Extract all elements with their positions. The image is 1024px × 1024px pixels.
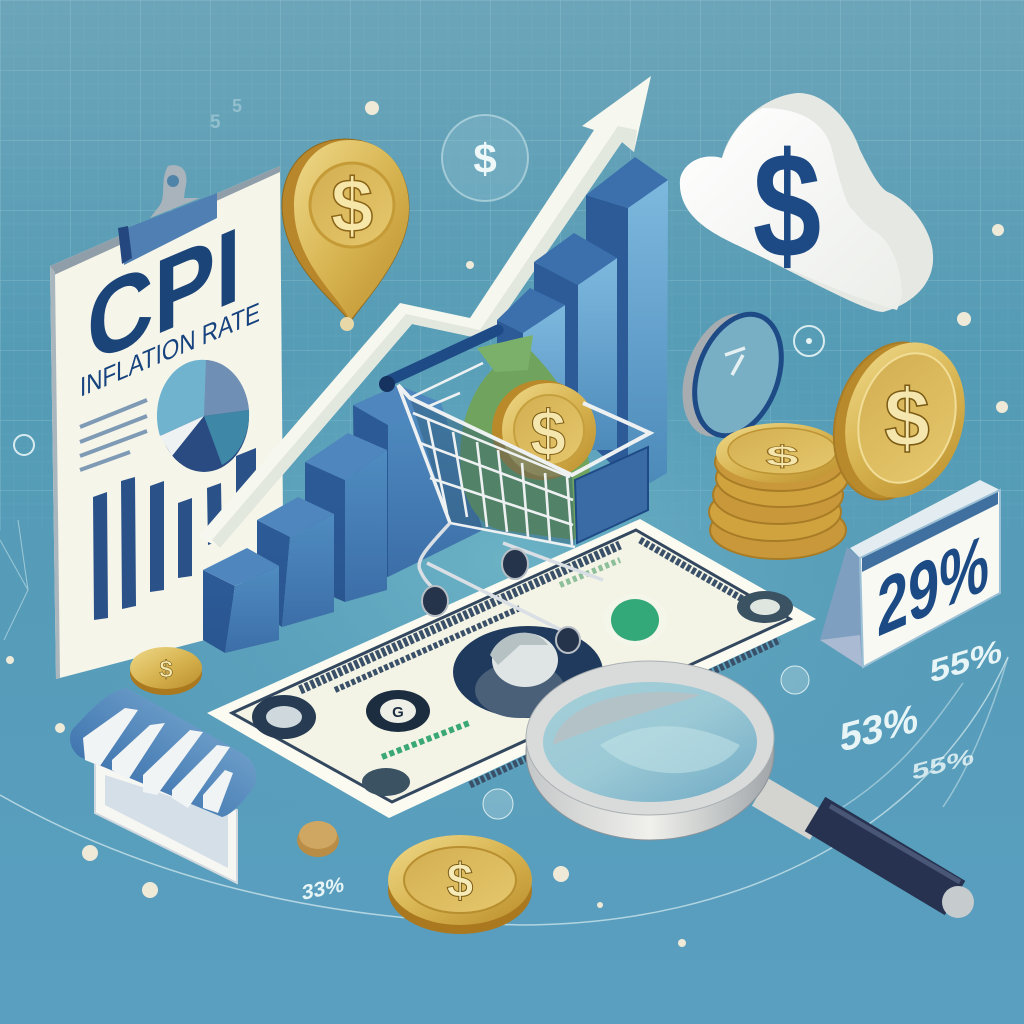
cart front panel bbox=[575, 447, 648, 543]
cart wheels bbox=[422, 549, 580, 653]
29 percent sign bbox=[820, 480, 1000, 667]
percent 55 small: 55% bbox=[912, 744, 974, 785]
cloud with dollar sign bbox=[680, 93, 933, 312]
bar 6 bbox=[534, 233, 617, 450]
document bar chart bbox=[93, 448, 256, 620]
cart coin bbox=[492, 380, 596, 480]
text lines bbox=[80, 400, 147, 470]
large magnifying glass bbox=[526, 661, 974, 918]
cart handle bbox=[379, 330, 498, 392]
top faint digits: 5 bbox=[210, 112, 221, 133]
dollar sign: $ bbox=[331, 164, 373, 249]
bottom emblem bbox=[362, 768, 410, 796]
coin stack bbox=[709, 423, 848, 559]
money bag bbox=[460, 335, 590, 540]
portrait bbox=[453, 626, 603, 718]
green serial text bbox=[382, 723, 469, 757]
shop awning bbox=[70, 688, 256, 883]
bar 3 bbox=[305, 433, 387, 602]
bar 1 bbox=[203, 548, 279, 653]
percent 33: 33% bbox=[302, 873, 344, 905]
document clip bbox=[118, 165, 217, 265]
small bubble ring bbox=[794, 326, 824, 356]
bar 4 bbox=[353, 385, 483, 577]
bar 5 bbox=[497, 288, 565, 470]
right emblem bbox=[737, 591, 793, 623]
percent 55: 55% bbox=[930, 632, 1002, 690]
small bronze coin bbox=[297, 821, 339, 857]
pie chart bbox=[157, 360, 249, 472]
coin map pin bbox=[282, 139, 409, 331]
floating percentages bbox=[210, 96, 1002, 905]
cart basket wires bbox=[398, 363, 650, 633]
percent 53: 53% bbox=[840, 695, 918, 761]
subheading: inflation rate: INFLATION RATE bbox=[80, 296, 260, 403]
dollar sign: $ bbox=[753, 122, 821, 290]
bar 2 bbox=[257, 497, 334, 627]
shopping cart bbox=[379, 330, 650, 653]
green treasury seal bbox=[603, 594, 667, 646]
bill seal bbox=[366, 690, 430, 732]
basket interior tint bbox=[410, 398, 575, 545]
bill seal: G bbox=[392, 704, 404, 721]
glass dollar bubble: $ bbox=[473, 135, 497, 182]
document: CPI inflation rate report bbox=[50, 165, 283, 679]
heading: CPI: CPI bbox=[87, 204, 241, 386]
small gold coin left: $ bbox=[159, 656, 173, 683]
dollar sign: $ bbox=[884, 373, 930, 464]
cart coin: $ bbox=[530, 397, 566, 469]
dollar sign: $ bbox=[447, 855, 474, 908]
rising arrow bbox=[198, 76, 651, 548]
glass dollar bubble bbox=[442, 115, 528, 201]
dollar sign: $ bbox=[765, 440, 799, 472]
small gold coin left bbox=[130, 647, 202, 695]
floating percentages: 5 bbox=[232, 96, 242, 116]
blue 3D bar chart bbox=[203, 157, 668, 653]
left emblem bbox=[252, 695, 316, 739]
bottom gold coin bbox=[388, 835, 532, 934]
bar 7 bbox=[586, 157, 668, 483]
engraved rows bbox=[300, 540, 780, 785]
small glass lens bbox=[667, 301, 797, 449]
dollar bill bbox=[207, 519, 816, 818]
standing gold coin bbox=[816, 328, 983, 513]
